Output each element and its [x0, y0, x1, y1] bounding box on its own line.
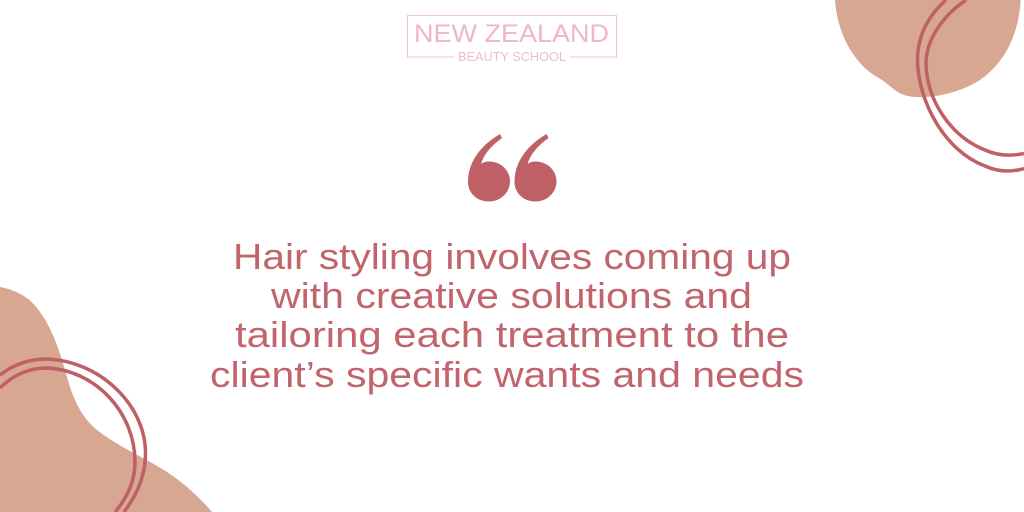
decoration: bottom-left blob with rings — [0, 287, 212, 512]
logo: New Zealand Beauty School: BEAUTY SCHOOL — [458, 50, 566, 64]
quote text: with creative solutions and — [270, 275, 752, 316]
quote text: tailoring each treatment to the — [235, 314, 789, 355]
quote text: client’s specific wants and needs — [210, 354, 804, 395]
quote text — [210, 236, 804, 395]
logo: New Zealand Beauty School: NEW ZEALAND — [414, 20, 609, 48]
decoration: top-right blob with rings — [835, 0, 1024, 171]
icon: opening quotation mark — [468, 134, 556, 202]
quote text: Hair styling involves coming up — [233, 236, 791, 277]
logo: New Zealand Beauty School — [408, 16, 616, 64]
